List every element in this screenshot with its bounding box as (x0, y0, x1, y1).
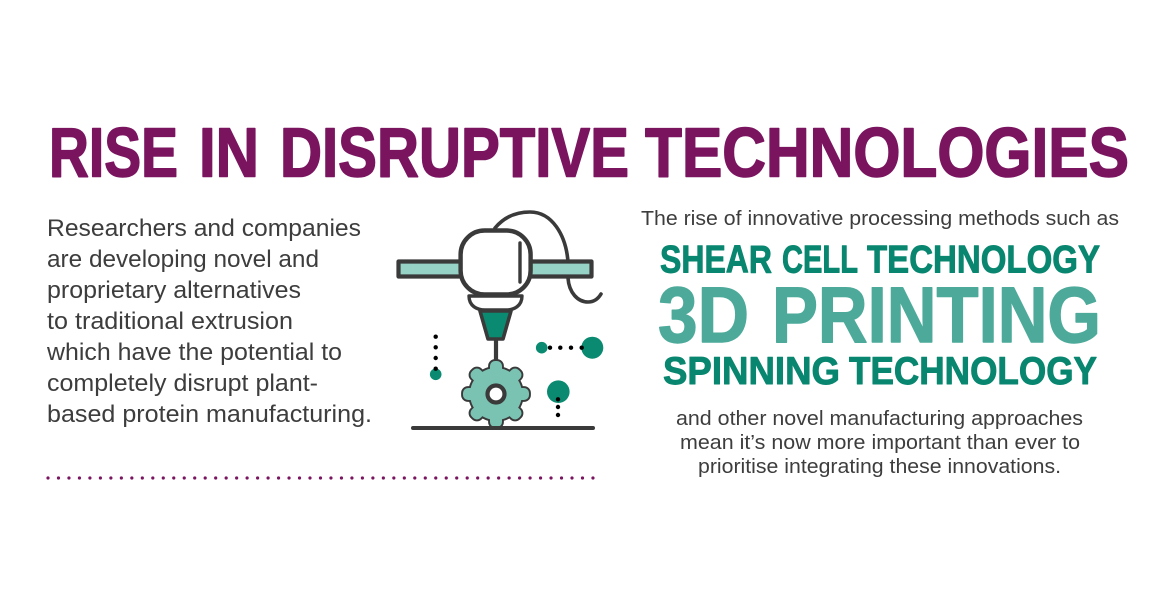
icon: filament (494, 340, 498, 361)
icon: nozzle (480, 311, 511, 339)
text block: closing description: prioritise integrating these innovations. (698, 456, 1061, 478)
icon: right droplets and dots (536, 337, 603, 359)
heading: spinning technology: SPINNING (663, 350, 840, 393)
icon: 3D printer nozzle printing a gear (398, 212, 603, 428)
heading: 3D printing (658, 270, 1101, 359)
icon: gear (463, 361, 529, 427)
text block: closing description (676, 408, 1083, 478)
text block: closing description: and other novel manufacturing approaches (676, 408, 1083, 430)
text block: left description: based protein manufacturing. (47, 401, 372, 428)
heading: shear cell technology (660, 238, 1100, 282)
heading: 3D printing: 3D (658, 270, 749, 359)
icon: print head slot (518, 243, 522, 282)
text block: left description: completely disrupt plant- (47, 370, 318, 397)
icon: nozzle collar (469, 296, 522, 310)
icon: lower droplet and dots (547, 380, 570, 417)
icon: left droplet and dots (430, 334, 442, 380)
text block: closing description: mean it’s now more important than ever to (680, 432, 1080, 454)
text block: left description: proprietary alternatives (47, 277, 301, 304)
text block: left description (46, 215, 372, 428)
icon: base line (413, 426, 593, 430)
icon: cable (495, 212, 601, 302)
heading: shear cell technology: TECHNOLOGY (867, 238, 1100, 282)
title: RISE (49, 114, 178, 192)
dotted divider (48, 476, 593, 480)
text: intro line: The rise of innovative processing methods such as (641, 208, 1119, 230)
heading: 3D printing: PRINTING (772, 270, 1101, 359)
title: DISRUPTIVE (280, 114, 629, 192)
heading: spinning technology (663, 350, 1097, 393)
text block: left description: Researchers and companies (47, 215, 361, 242)
text block: left description: to traditional extrusion (47, 308, 293, 335)
text block: left description: are developing novel and (47, 246, 319, 273)
title (49, 114, 1129, 192)
icon: print head (461, 230, 531, 294)
heading: shear cell technology: CELL (782, 238, 858, 282)
heading: spinning technology: TECHNOLOGY (849, 350, 1097, 393)
text block: left description: which have the potential to (46, 339, 342, 366)
icon: gantry rail (398, 262, 592, 276)
heading: shear cell technology: SHEAR (660, 238, 772, 282)
title: IN (199, 114, 259, 192)
